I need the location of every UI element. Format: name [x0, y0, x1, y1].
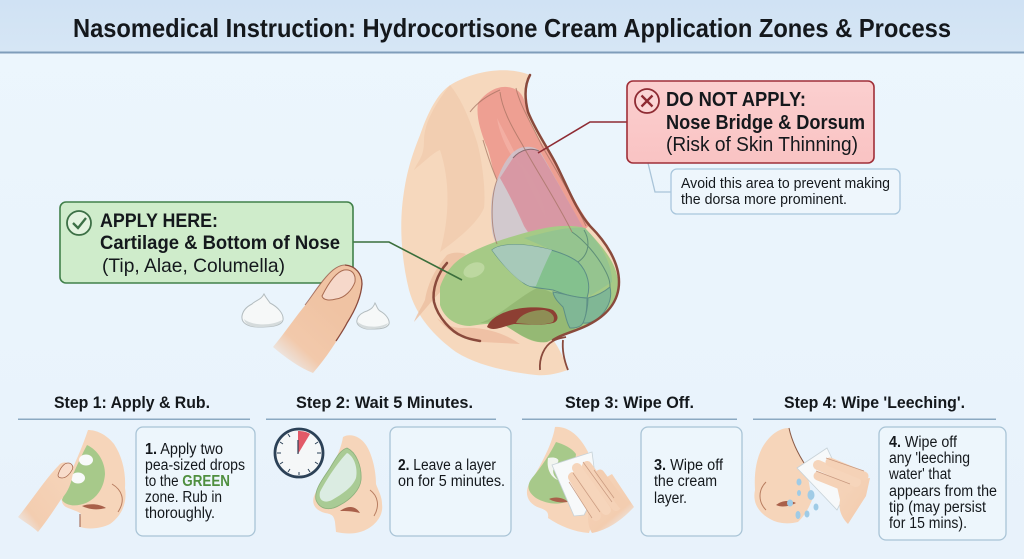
step 1 illustration: [18, 430, 126, 532]
step 4 text box: water' that: [888, 466, 952, 483]
step 4 text box: any 'leeching: [889, 450, 970, 467]
step 3 heading: Step 3: Wipe Off.: [565, 393, 694, 412]
teal alar cartilage: [492, 245, 589, 298]
step 1 text box: to the GREEN: [145, 473, 230, 490]
callout text: [666, 89, 865, 156]
green zone: tip and alae: [440, 226, 618, 342]
leader: apply here: [353, 242, 462, 280]
finger: [18, 462, 73, 532]
callout text: DO NOT APPLY:: [666, 89, 806, 111]
step 4 text box: [879, 427, 1006, 540]
face shading: [414, 85, 485, 252]
step 1 text box: zone. Rub in: [145, 489, 222, 506]
green zone: [62, 445, 105, 505]
icon: timer clock: [275, 429, 323, 477]
red zone: nose bridge: [477, 87, 590, 243]
step 2 text box: 2. Leave a layer: [398, 457, 496, 474]
nose skin base: [401, 70, 619, 375]
upper tip green: [524, 228, 612, 296]
fingernail: [322, 270, 355, 300]
cartilage contour lines: [470, 88, 586, 244]
step 1 text box: [136, 427, 255, 536]
icon: cross: [635, 89, 659, 113]
callout text: (Tip, Alae, Columella): [102, 255, 285, 277]
step 1 heading: Step 1: Apply & Rub.: [54, 393, 210, 412]
step 4 text box: tip (may persist: [889, 499, 987, 516]
icon: check: [67, 211, 91, 235]
nostril: [82, 504, 106, 509]
alar crease: [434, 263, 480, 341]
columella lines: [540, 337, 568, 370]
leeching drops: [787, 478, 818, 519]
step 4: [753, 393, 1006, 540]
title banner: Nasomedical Instruction: Hydrocortisone Cream Application Zones & Process: [73, 13, 951, 43]
cream smear: [548, 457, 558, 480]
grey overlap zone: [491, 147, 584, 244]
step 4 text box: 4. Wipe off: [889, 434, 958, 451]
step 3: [522, 393, 742, 536]
step 3 text box: 3. Wipe off: [654, 457, 724, 474]
step 1 text box: thoroughly.: [145, 505, 215, 522]
step 2 text box: on for 5 minutes.: [398, 473, 505, 490]
tissue: [797, 448, 847, 510]
callout text: APPLY HERE:: [100, 210, 218, 232]
hand with fingers: [569, 462, 634, 533]
cream dollop large: [242, 294, 283, 327]
main nose illustration: [401, 70, 619, 375]
step 4 text box: appears from the: [889, 483, 997, 500]
callout text: Cartilage & Bottom of Nose: [100, 232, 340, 254]
callout: do not apply: [627, 81, 874, 163]
step 3 text box: layer.: [654, 490, 687, 507]
step 2: [266, 393, 511, 536]
callout: apply here: [60, 202, 353, 283]
step 2 heading: Step 2: Wait 5 Minutes.: [296, 393, 473, 412]
step 4 text box: for 15 mins).: [889, 515, 967, 532]
step 4 heading: Step 4: Wipe 'Leeching'.: [784, 393, 965, 412]
tissue: [552, 452, 597, 516]
hand with fingers: [816, 458, 870, 524]
note: avoid area: [671, 169, 900, 214]
step 2 text box: [390, 427, 511, 536]
step 3 text box: the cream: [654, 473, 717, 490]
nostril: [487, 307, 558, 329]
step 1 text box: 1. Apply two: [145, 441, 223, 458]
dorsum outline: [526, 75, 619, 340]
note: avoid area: the dorsa more prominent.: [681, 192, 847, 208]
callout text: [100, 210, 340, 277]
green zone: [529, 442, 576, 504]
step 3 text box: [641, 427, 742, 536]
note: avoid area: Avoid this area to prevent making: [681, 176, 890, 192]
step 2 illustration: [313, 435, 382, 534]
callout text: (Risk of Skin Thinning): [666, 134, 858, 156]
step 4 illustration: [754, 428, 870, 524]
title banner: [0, 0, 1024, 54]
cream dollop small: [357, 303, 389, 329]
cream dots: [79, 454, 93, 466]
cream layer: [320, 453, 357, 502]
step 3 illustration: [527, 427, 634, 533]
nostril: [340, 507, 360, 513]
connector to note: [648, 163, 671, 192]
nostril: [776, 501, 796, 506]
tip highlight: [461, 259, 487, 281]
red zone highlight: [497, 118, 546, 218]
step 1: [18, 393, 255, 536]
finger pointing: [273, 265, 362, 373]
leader: do not apply: [538, 122, 627, 153]
step 1 text box: pea-sized drops: [145, 457, 245, 474]
green zone: [316, 448, 361, 509]
nostril: [549, 498, 568, 502]
callout text: Nose Bridge & Dorsum: [666, 112, 865, 134]
